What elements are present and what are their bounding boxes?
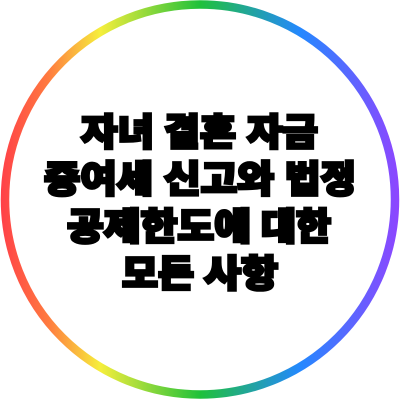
title — [44, 112, 356, 294]
title line 3: 대한 — [261, 206, 331, 248]
title line 1 — [81, 112, 318, 153]
title line 2: 법정 — [285, 159, 356, 200]
title line 4 — [122, 254, 278, 294]
title line 4: 모든 — [122, 254, 194, 294]
title line 4: 사항 — [204, 254, 278, 294]
title line 3 — [67, 206, 331, 248]
title line 1: 자금 — [247, 112, 318, 153]
title line 1: 결혼 — [164, 112, 236, 153]
title line 2 — [44, 159, 356, 200]
title line 3: 공제한도에 — [67, 206, 251, 248]
title line 2: 증여세 — [44, 159, 153, 200]
title line 2: 신고와 — [164, 159, 274, 200]
title line 1: 자녀 — [81, 112, 154, 153]
